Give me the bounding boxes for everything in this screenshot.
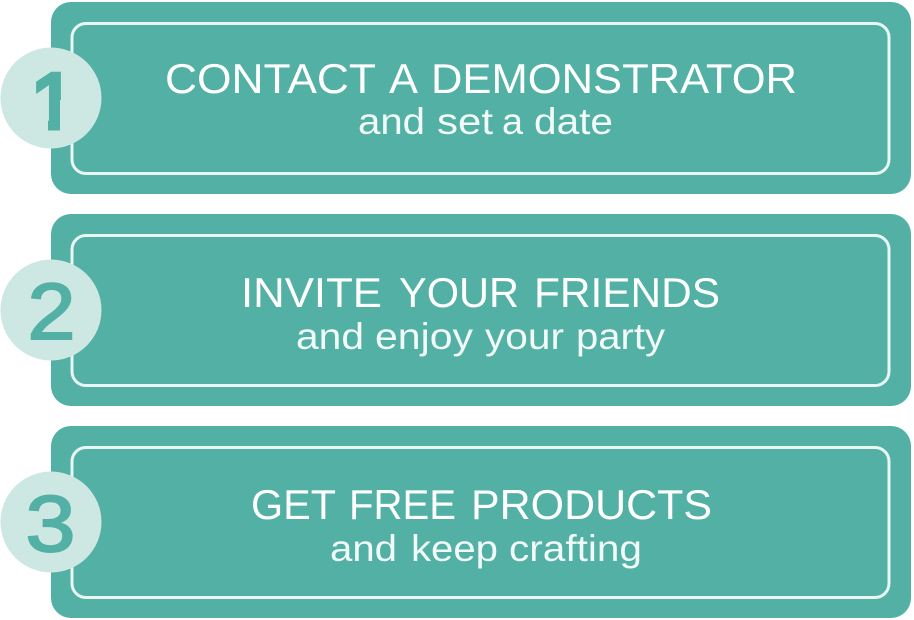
number badge 1 <box>0 48 102 148</box>
heading: invite your friends: YOUR <box>399 269 519 316</box>
panel: step 1 <box>0 2 911 194</box>
subheading: and keep crafting: crafting <box>509 528 642 569</box>
heading: invite your friends: FRIENDS <box>534 269 720 316</box>
heading: contact a demonstrator: A <box>389 55 418 102</box>
subheading: and set a date <box>358 101 613 142</box>
subheading: and set a date: date <box>534 101 613 142</box>
subheading: and set a date: and <box>358 101 425 142</box>
number badge 3: 3 <box>26 479 76 568</box>
heading: invite your friends <box>241 269 720 316</box>
heading: contact a demonstrator: DEMONSTRATOR <box>431 55 797 102</box>
heading: get free products: GET <box>251 481 336 528</box>
heading: get free products: PRODUCTS <box>471 481 712 528</box>
heading: invite your friends: INVITE <box>241 269 382 316</box>
heading: contact a demonstrator <box>165 55 797 102</box>
panel: step 2 <box>0 214 911 406</box>
subheading: and enjoy your party: enjoy <box>375 316 474 357</box>
heading: get free products: FREE <box>349 481 456 528</box>
number badge 1: 1 <box>30 57 76 146</box>
panel: step 3 <box>0 426 911 618</box>
subheading: and enjoy your party <box>296 316 666 357</box>
subheading: and keep crafting <box>330 528 642 569</box>
subheading: and keep crafting: keep <box>411 528 498 569</box>
number badge 2: 2 <box>28 267 76 356</box>
heading: get free products <box>251 481 712 528</box>
number badge 2 <box>0 260 102 360</box>
subheading: and enjoy your party: your <box>485 316 564 357</box>
subheading: and enjoy your party: and <box>296 316 364 357</box>
subheading: and enjoy your party: party <box>576 316 666 357</box>
subheading: and keep crafting: and <box>330 528 397 569</box>
heading: contact a demonstrator: CONTACT <box>165 55 376 102</box>
subheading: and set a date: a <box>502 101 523 142</box>
subheading: and set a date: set <box>437 101 494 142</box>
number badge 3 <box>0 472 102 572</box>
